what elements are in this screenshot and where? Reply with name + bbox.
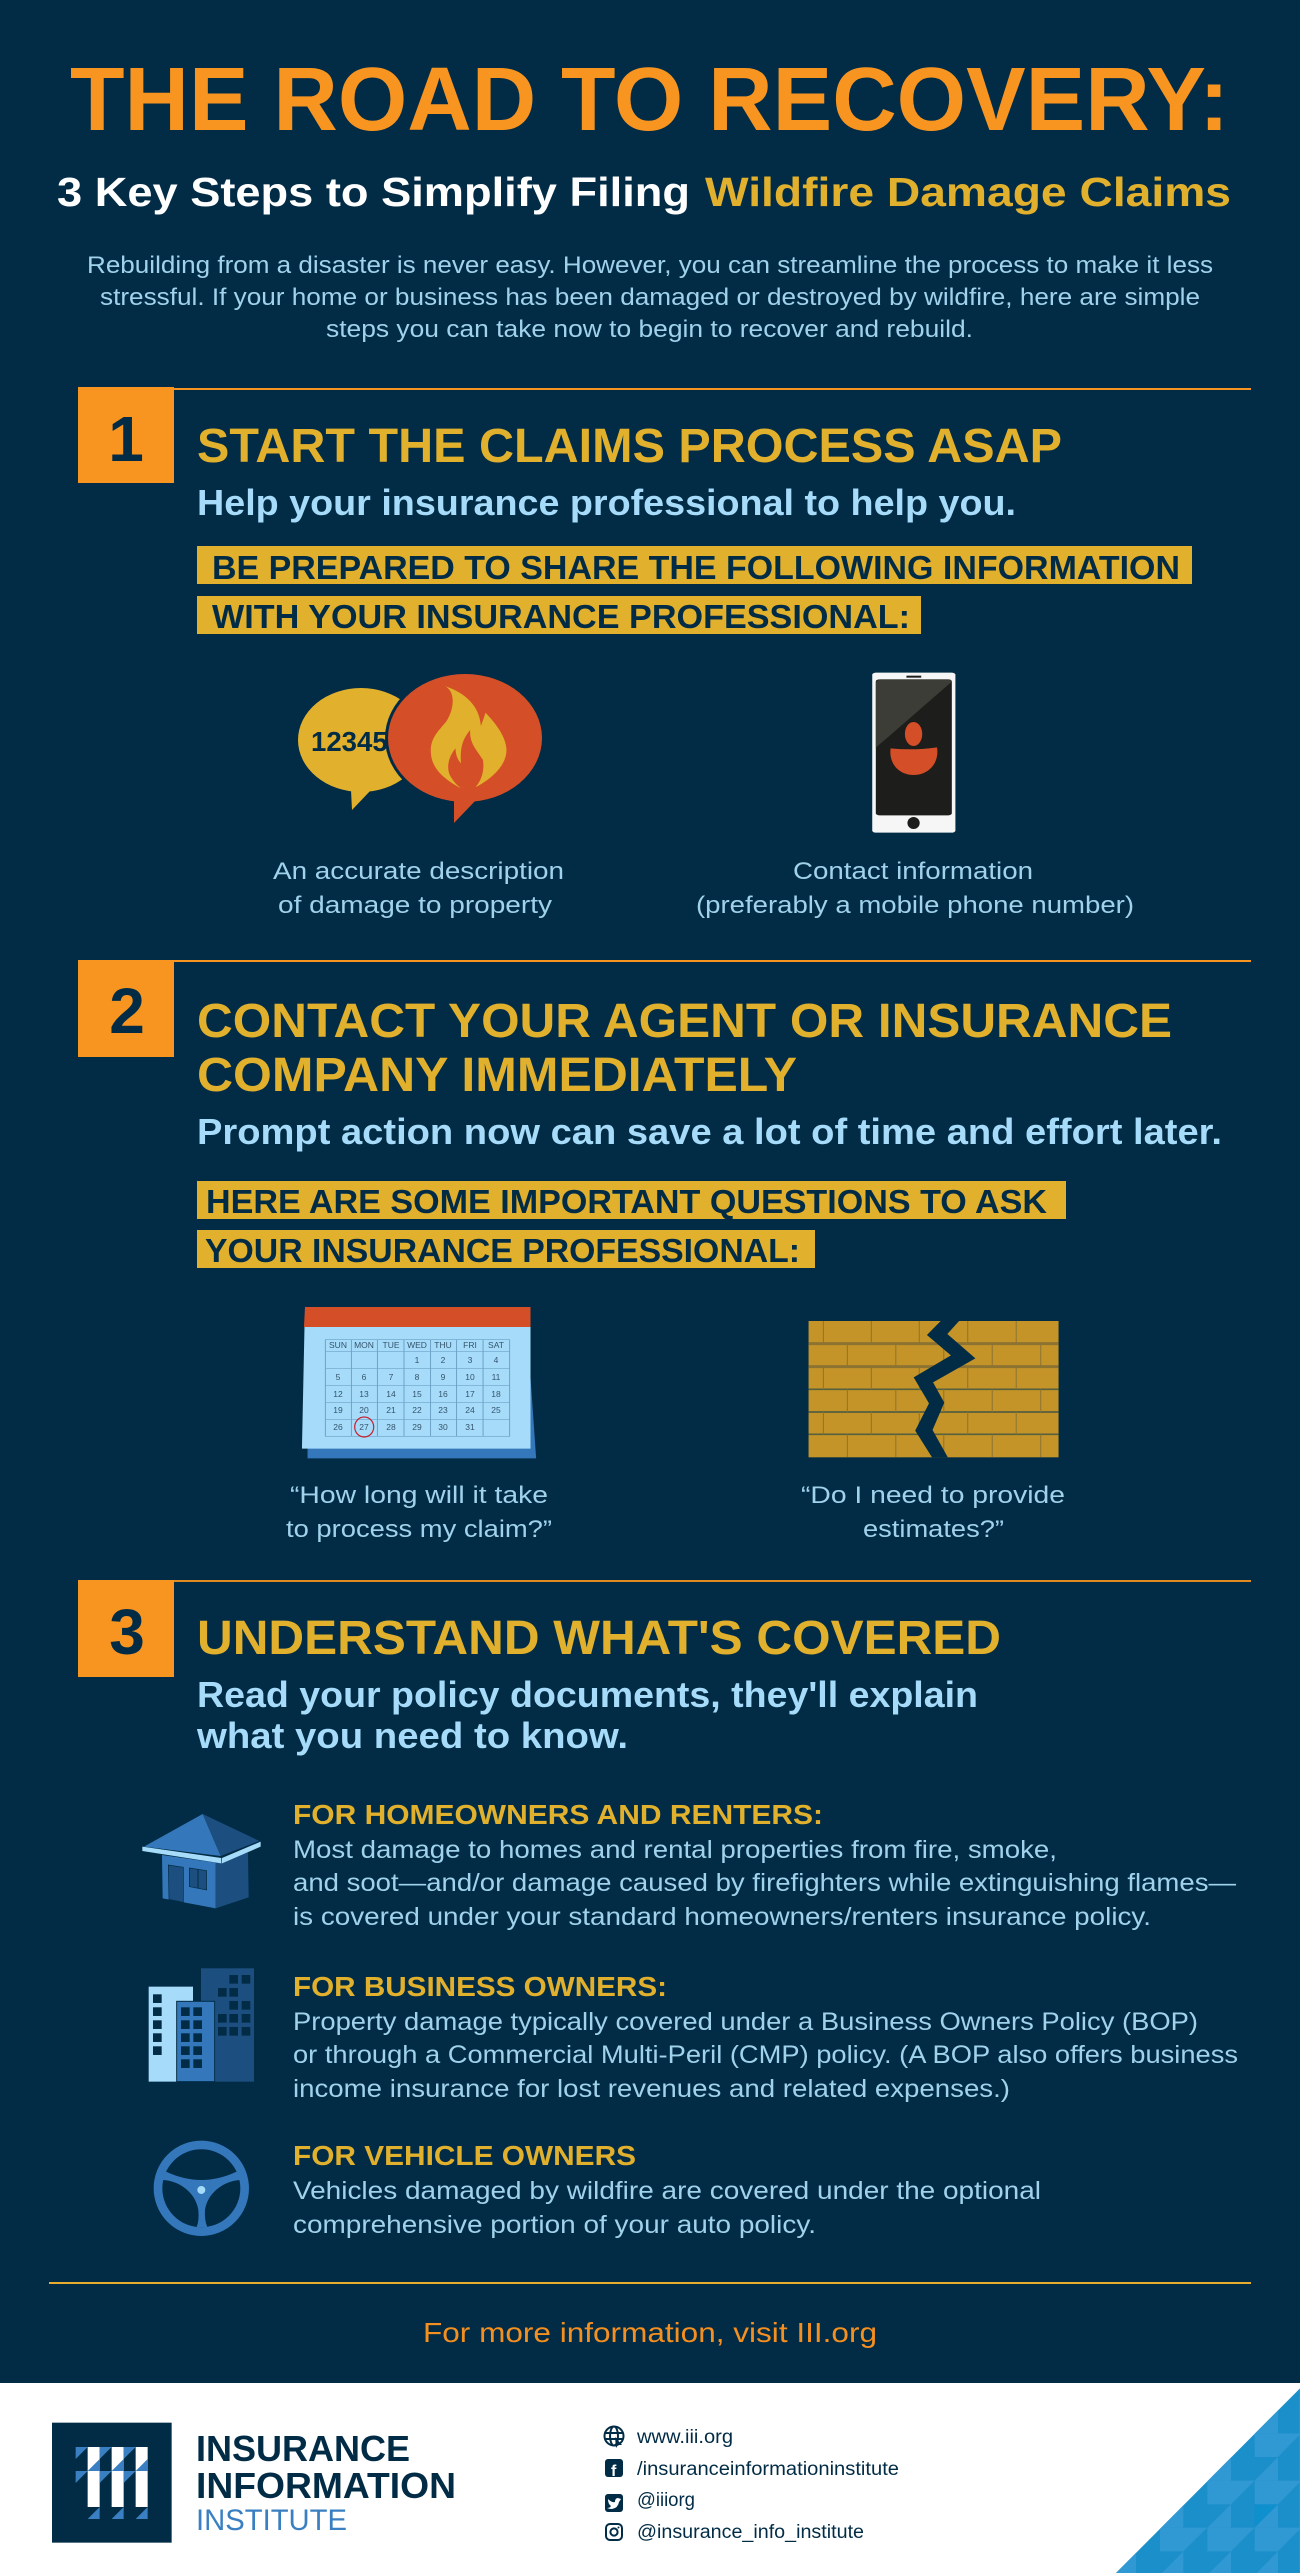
icon: calendar: 23 bbox=[438, 1405, 448, 1415]
contact: website bbox=[604, 2426, 733, 2448]
step 3 number badge: 3 bbox=[109, 1596, 145, 1668]
icon: calendar: 8 bbox=[415, 1372, 420, 1382]
step 2 highlighted callout: YOUR INSURANCE PROFESSIONAL: bbox=[205, 1233, 800, 1270]
homeowners text block: Most damage to homes and rental properties from fire, smoke, bbox=[293, 1836, 1057, 1864]
icon: calendar bbox=[302, 1307, 536, 1458]
icon: calendar: 2 bbox=[441, 1355, 446, 1365]
caption: claim time question bbox=[286, 1482, 552, 1543]
business owners text block: FOR BUSINESS OWNERS: bbox=[293, 1971, 667, 2002]
business owners text block: Property damage typically covered under a Business Owners Policy (BOP) bbox=[293, 2008, 1198, 2036]
icon: calendar: 22 bbox=[412, 1405, 422, 1415]
icon: steering wheel bbox=[158, 2145, 245, 2232]
business owners text block: income insurance for lost revenues and related expenses.) bbox=[293, 2075, 1010, 2103]
step 3 subheading: what you need to know. bbox=[196, 1715, 628, 1756]
icon: calendar: MON bbox=[354, 1340, 374, 1350]
intro text: steps you can take now to begin to recover and rebuild. bbox=[326, 316, 973, 343]
icon: calendar: 21 bbox=[386, 1405, 396, 1415]
icon: cracked brick wall bbox=[809, 1321, 1059, 1457]
homeowners text block bbox=[293, 1799, 1236, 1931]
step 1 number badge: 1 bbox=[108, 403, 144, 475]
icon: speech bubbles with numbers and flame: 123456 bbox=[311, 726, 403, 757]
icon: mobile phone bbox=[872, 673, 955, 833]
icon: calendar: 12 bbox=[333, 1389, 343, 1399]
icon: calendar: 9 bbox=[441, 1372, 446, 1382]
icon: calendar: 11 bbox=[492, 1372, 501, 1382]
homeowners text block: is covered under your standard homeowners/renters insurance policy. bbox=[293, 1903, 1151, 1931]
step 3 number badge bbox=[78, 1580, 174, 1677]
step 3 subheading: Read your policy documents, they'll explain bbox=[197, 1674, 978, 1715]
icon: calendar: SAT bbox=[488, 1340, 504, 1350]
step 1 highlighted callout: WITH YOUR INSURANCE PROFESSIONAL: bbox=[212, 599, 910, 636]
icon: calendar: 14 bbox=[386, 1389, 396, 1399]
icon: calendar: 5 bbox=[336, 1372, 341, 1382]
panel: step 3 bbox=[78, 1580, 1251, 2239]
vehicle owners text block: FOR VEHICLE OWNERS bbox=[293, 2140, 636, 2171]
step 1 highlighted callout bbox=[197, 546, 1192, 636]
icon: calendar: 4 bbox=[494, 1355, 499, 1365]
icon: calendar: 19 bbox=[333, 1405, 343, 1415]
step 2 highlighted callout: HERE ARE SOME IMPORTANT QUESTIONS TO ASK bbox=[206, 1184, 1047, 1221]
caption: damage description: of damage to property bbox=[278, 892, 552, 919]
subtitle: 3 Key Steps to Simplify Filing bbox=[57, 169, 690, 215]
icon: calendar: 28 bbox=[386, 1422, 396, 1432]
vehicle owners text block: Vehicles damaged by wildfire are covered under the optional bbox=[293, 2177, 1041, 2205]
step 2 number badge bbox=[78, 960, 174, 1057]
homeowners text block: and soot—and/or damage caused by firefighters while extinguishing flames— bbox=[293, 1869, 1236, 1897]
intro text: stressful. If your home or business has been damaged or destroyed by wildfire, here are simple bbox=[100, 284, 1200, 311]
logo wordmark bbox=[196, 2428, 456, 2537]
step 2 highlighted callout bbox=[197, 1181, 1066, 1270]
icon: calendar: WED bbox=[407, 1340, 427, 1350]
caption: estimates question: estimates?” bbox=[863, 1516, 1004, 1543]
logo wordmark: INSURANCE bbox=[196, 2428, 410, 2469]
icon: calendar: 30 bbox=[438, 1422, 448, 1432]
panel: footer bbox=[0, 2370, 1300, 2573]
step 1 subheading: Help your insurance professional to help you. bbox=[197, 482, 1016, 523]
logo wordmark: INFORMATION bbox=[196, 2465, 456, 2506]
icon: calendar: 20 bbox=[359, 1405, 369, 1415]
icon: calendar: 3 bbox=[468, 1355, 473, 1365]
icon: calendar: 17 bbox=[465, 1389, 475, 1399]
icon: calendar: TUE bbox=[382, 1340, 400, 1350]
panel: step 1 bbox=[78, 387, 1251, 919]
icon: calendar: 1 bbox=[415, 1355, 420, 1365]
icon: speech bubbles with numbers and flame bbox=[298, 671, 545, 823]
panel: step 2 bbox=[78, 960, 1251, 1543]
step 3 heading: UNDERSTAND WHAT'S COVERED bbox=[197, 1612, 1001, 1665]
contact: facebook: f bbox=[611, 2463, 617, 2480]
contact: facebook: /insuranceinformationinstitute bbox=[637, 2459, 899, 2480]
icon: calendar: 7 bbox=[389, 1372, 394, 1382]
caption: estimates question: “Do I need to provide bbox=[801, 1482, 1065, 1509]
more information link: For more information, visit III.org bbox=[423, 2317, 877, 2348]
icon: calendar: 31 bbox=[465, 1422, 475, 1432]
icon: house bbox=[142, 1814, 261, 1908]
step 2 heading: CONTACT YOUR AGENT OR INSURANCE bbox=[197, 995, 1172, 1048]
contact: twitter: @iiiorg bbox=[637, 2490, 695, 2511]
step 1 number badge bbox=[78, 387, 174, 483]
icon: calendar: 25 bbox=[491, 1405, 501, 1415]
contact: website: www.iii.org bbox=[636, 2427, 733, 2448]
vehicle owners text block: comprehensive portion of your auto policy. bbox=[293, 2211, 816, 2239]
icon: calendar: 16 bbox=[438, 1389, 448, 1399]
business owners text block: or through a Commercial Multi-Peril (CMP) policy. (A BOP also offers business bbox=[293, 2041, 1238, 2069]
icon: calendar: FRI bbox=[463, 1340, 477, 1350]
contact: twitter bbox=[605, 2490, 695, 2512]
caption: contact information: (preferably a mobile phone number) bbox=[696, 892, 1134, 919]
logo wordmark: INSTITUTE bbox=[196, 2504, 347, 2537]
subtitle bbox=[57, 169, 1231, 215]
icon: calendar: 27 bbox=[359, 1422, 369, 1432]
icon: calendar: 26 bbox=[333, 1422, 343, 1432]
icon: calendar: 13 bbox=[359, 1389, 369, 1399]
caption: contact information bbox=[696, 858, 1134, 919]
step 2 number badge: 2 bbox=[109, 975, 145, 1047]
step 3 subheading bbox=[196, 1674, 978, 1756]
step 2 heading: COMPANY IMMEDIATELY bbox=[197, 1049, 797, 1102]
icon: calendar: SUN bbox=[329, 1340, 347, 1350]
step 2 heading bbox=[197, 995, 1172, 1102]
contact: instagram: @insurance_info_institute bbox=[637, 2522, 864, 2543]
icon: calendar: 29 bbox=[412, 1422, 422, 1432]
step 1 highlighted callout: BE PREPARED TO SHARE THE FOLLOWING INFORMATION bbox=[212, 550, 1180, 587]
subtitle: Wildfire Damage Claims bbox=[705, 169, 1231, 215]
caption: damage description bbox=[273, 858, 564, 919]
caption: damage description: An accurate description bbox=[273, 858, 564, 885]
logo mark bbox=[52, 2423, 172, 2543]
icon: calendar: 10 bbox=[465, 1372, 475, 1382]
step 2 subheading: Prompt action now can save a lot of time and effort later. bbox=[197, 1111, 1222, 1152]
corner triangle pattern bbox=[1116, 2388, 1300, 2573]
step 1 heading: START THE CLAIMS PROCESS ASAP bbox=[197, 420, 1062, 473]
icon: calendar: THU bbox=[434, 1340, 452, 1350]
icon: calendar: 24 bbox=[465, 1405, 475, 1415]
icon: calendar: 15 bbox=[412, 1389, 422, 1399]
icon: calendar: 18 bbox=[491, 1389, 501, 1399]
caption: claim time question: to process my claim?” bbox=[286, 1516, 552, 1543]
icon: calendar: 6 bbox=[362, 1372, 367, 1382]
caption: claim time question: “How long will it take bbox=[290, 1482, 548, 1509]
title: THE ROAD TO RECOVERY: bbox=[70, 50, 1229, 150]
vehicle owners text block bbox=[293, 2140, 1041, 2239]
intro text: Rebuilding from a disaster is never easy. However, you can streamline the process to make it less bbox=[87, 252, 1213, 279]
intro text bbox=[87, 252, 1213, 343]
icon: office buildings bbox=[149, 1968, 254, 2082]
homeowners text block: FOR HOMEOWNERS AND RENTERS: bbox=[293, 1799, 823, 1830]
caption: estimates question bbox=[801, 1482, 1065, 1543]
caption: contact information: Contact information bbox=[793, 858, 1033, 885]
business owners text block bbox=[293, 1971, 1238, 2103]
